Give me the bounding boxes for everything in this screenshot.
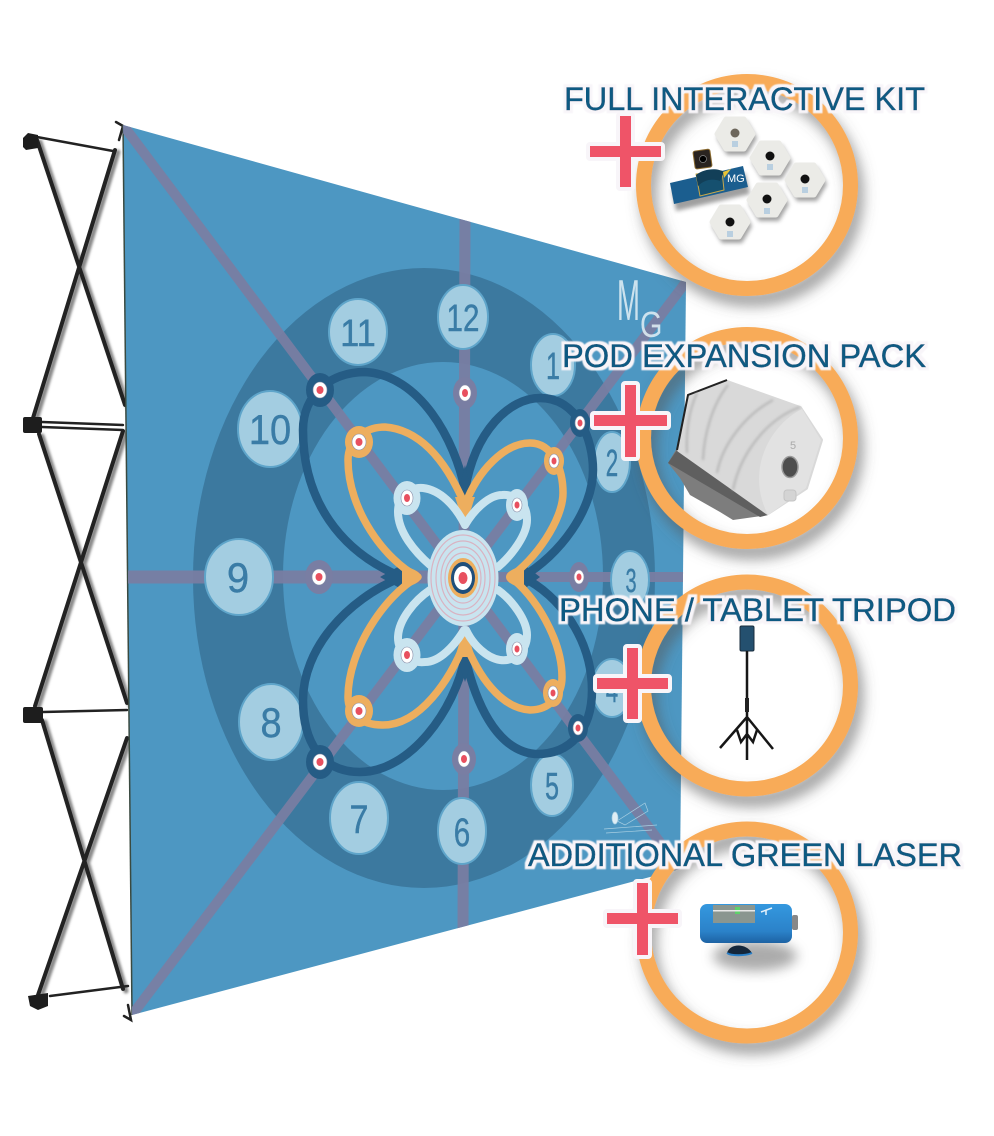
plus [607, 883, 678, 955]
banner numbers: 12 [447, 298, 479, 340]
plus [590, 116, 661, 187]
tripod photo [720, 626, 773, 760]
kit photo [670, 119, 827, 243]
banner numbers: 8 [260, 700, 282, 746]
banner numbers: 9 [227, 554, 249, 601]
label: ADDITIONAL GREEN LASER [528, 837, 962, 873]
ring [644, 829, 850, 1036]
banner numbers: 1 [546, 345, 560, 387]
small diagram at banner corner [604, 803, 657, 833]
banner numbers: 5 [545, 765, 559, 807]
plus [597, 648, 668, 719]
ring [644, 582, 850, 789]
label: POD EXPANSION PACK [562, 338, 926, 374]
banner [123, 125, 686, 1015]
banner numbers: 11 [340, 311, 376, 354]
inner light disc [283, 362, 603, 790]
banner numbers: 4 [606, 671, 618, 710]
pop-up display frame [23, 122, 131, 1020]
banner numbers: 2 [606, 442, 618, 485]
ring [644, 334, 850, 542]
banner numbers: 10 [249, 407, 291, 453]
plus [594, 385, 667, 457]
banner numbers: 6 [454, 811, 470, 855]
label: FULL INTERACTIVE KIT [564, 81, 925, 117]
laser photo [700, 904, 798, 971]
item 3: phone / tablet tripod [559, 582, 956, 789]
item 4: additional green laser [528, 829, 962, 1036]
pod photo: 5 [790, 440, 796, 452]
banner numbers [205, 285, 649, 864]
cross spokes [123, 125, 686, 1015]
centre target [428, 530, 498, 626]
label: PHONE / TABLET TRIPOD [559, 592, 956, 628]
target nodes [305, 373, 590, 779]
pod photo [668, 380, 821, 520]
ring [644, 82, 850, 288]
light inner petals [398, 488, 527, 662]
dark butterfly petals [303, 372, 593, 772]
kit photo: MG [727, 173, 745, 185]
outer dark ring [193, 268, 655, 888]
banner numbers: 3 [625, 562, 637, 599]
banner numbers: 7 [349, 796, 369, 842]
orange butterfly petals [348, 427, 563, 725]
item 2: pod expansion pack [562, 334, 926, 542]
banner logo: G [640, 304, 662, 345]
banner logo [617, 268, 662, 345]
item 1: full interactive kit [564, 81, 925, 288]
banner logo: M [617, 268, 640, 333]
